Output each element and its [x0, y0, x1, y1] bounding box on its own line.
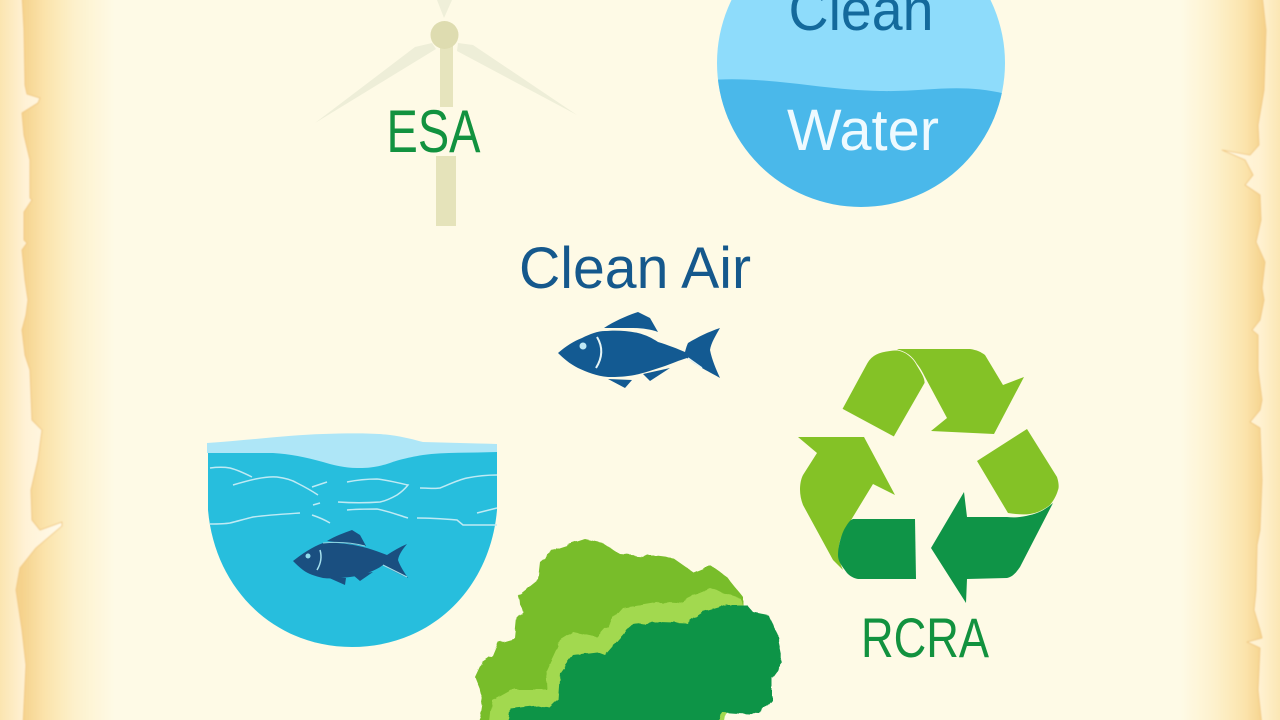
tree canopy: [475, 539, 783, 720]
top left segment: [842, 350, 925, 437]
water ripple lines: [210, 467, 497, 525]
icon: small fish: [293, 530, 408, 585]
right blade: [457, 43, 577, 115]
recycling symbol: [798, 349, 1059, 669]
front foliage: [505, 605, 783, 720]
water half: [710, 79, 1010, 210]
water bowl with fish: [207, 433, 497, 647]
upper tower: [440, 44, 453, 107]
water body: [208, 443, 497, 647]
lower tower: [436, 156, 456, 226]
right arrow: [931, 492, 1053, 603]
heading: Clean Air: Clean Air: [519, 236, 751, 301]
label: RCRA: RCRA: [861, 606, 990, 669]
right segment: [977, 429, 1059, 514]
icon: blue fish: [558, 312, 720, 388]
label: Water: Water: [787, 98, 939, 163]
bottom left segment: [838, 519, 916, 579]
left arrow: [798, 437, 895, 570]
middle foliage: [487, 588, 745, 720]
outer foliage: [475, 539, 743, 720]
label: ESA: ESA: [386, 98, 480, 165]
sky half: [717, 0, 1005, 119]
left blade: [315, 43, 436, 123]
top arrow: [897, 349, 1024, 434]
clean water circle badge: [710, 0, 1010, 210]
wind turbine with ESA label: [315, 0, 577, 226]
hub: [430, 21, 458, 49]
water surface: [207, 433, 497, 468]
top blade: [437, 0, 452, 18]
